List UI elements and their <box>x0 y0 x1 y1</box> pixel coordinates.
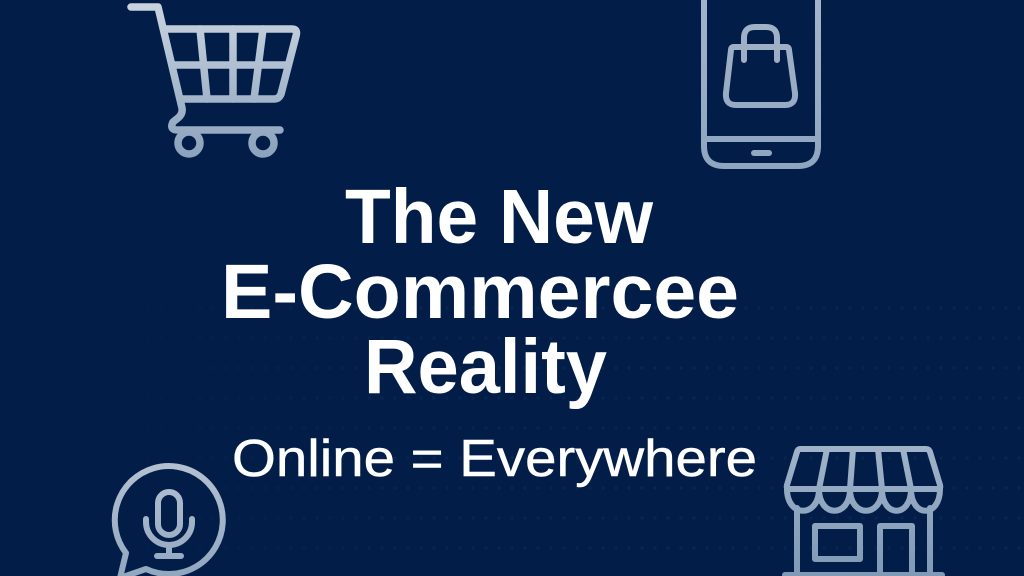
icon: shopping cart <box>131 7 296 154</box>
title: The New E-Commercee Reality: The New <box>345 174 654 260</box>
subtitle: Online = Everywhere: Online = Everywhere <box>232 430 757 488</box>
icon: storefront <box>785 449 942 575</box>
title: The New E-Commercee Reality <box>221 174 739 410</box>
title: The New E-Commercee Reality: E-Commercee <box>221 249 739 335</box>
title: The New E-Commercee Reality: Reality <box>364 324 607 410</box>
icon: voice chat bubble with microphone <box>115 466 223 576</box>
icon: smartphone with shopping bag <box>704 0 818 166</box>
